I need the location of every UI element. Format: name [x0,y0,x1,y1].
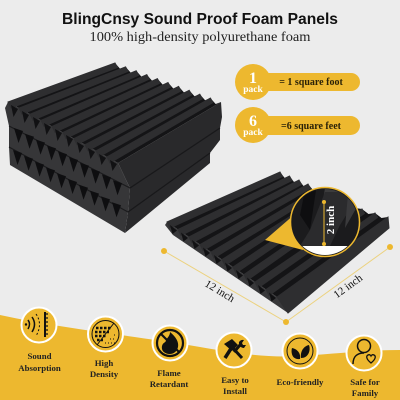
middle panel notches [14,128,122,195]
icon: sound waves and wall [22,308,56,342]
feature: sound absorption [18,308,61,373]
pill: 1 square foot: = 1 square foot [279,77,343,88]
pack badge: 1 pack: pack [243,85,263,95]
2 inch measure: 2 inch [325,206,337,234]
feature: high density: Density [90,369,119,379]
stack top wedges [8,63,213,163]
magnifier lens [290,188,360,260]
feature: sound absorption: Absorption [18,363,61,373]
yellow bottom band [0,315,400,400]
dimension: 12 inch right: 12 inch [331,272,365,301]
icon: person with heart [346,336,382,370]
feature: safe for family: Family [352,388,379,398]
panel base [167,172,388,297]
icon: dot grid [88,316,123,352]
pack badge: 1 pack [235,64,360,100]
magnifier pointer [265,214,303,250]
feature: safe for family: Safe for [350,377,380,387]
feature: easy to install: Easy to [221,375,249,385]
single foam panel [165,172,389,313]
feature: eco-friendly: Eco-friendly [277,377,324,387]
feature: flame retardant: Retardant [150,379,188,389]
icon: prohibited flame [152,326,188,360]
feature: sound absorption: Sound [28,351,52,361]
title: BlingCnsy Sound Proof Foam Panels [62,11,338,28]
dimension: 12 inch right [283,244,393,325]
pill: 6 square feet: =6 square feet [281,121,342,132]
feature: high density: High [95,358,113,368]
feature: flame retardant [150,326,188,389]
feature: easy to install [216,332,252,396]
dimension: 12 inch left: 12 inch [202,278,237,305]
pack badge: 1 pack: 1 [249,70,257,87]
feature: safe for family [346,336,382,398]
bottom panel notches [13,150,121,217]
subtitle: 100% high-density polyurethane foam [90,29,311,44]
panel end notches [170,225,276,302]
panel wedges [167,172,389,313]
icon: hammer and wrench [216,332,252,368]
dimension: 12 inch left [161,248,286,322]
stack top surface [8,63,221,163]
feature: high density [88,316,123,379]
icon: leaves [282,334,318,368]
top panel end notches [11,105,117,171]
magnifier callout [265,188,360,260]
pack badge: 6 pack: 6 [249,113,257,130]
panel front face [165,222,288,313]
stack side faces [118,102,222,233]
pack badge: 6 pack: pack [243,128,263,138]
stack front faces [5,102,130,233]
feature: flame retardant: Flame [157,368,181,378]
feature: eco-friendly [277,334,324,387]
pack badge: 6 pack [235,107,360,143]
foam panel stack [5,63,222,233]
feature: easy to install: Install [223,386,248,396]
